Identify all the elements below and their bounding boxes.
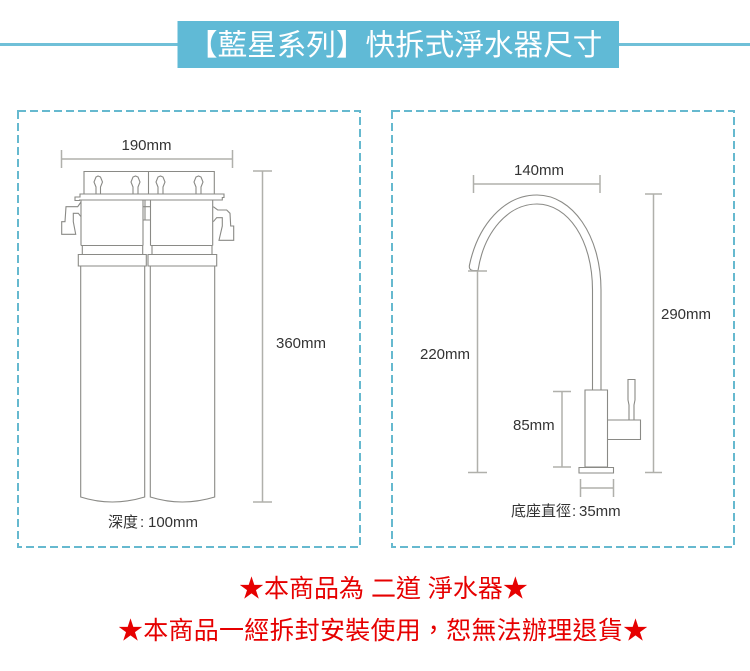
label: depth: 深度 (108, 514, 138, 531)
dimension: height 85mm (513, 392, 571, 467)
dimension: height 360mm (253, 171, 326, 502)
dimension: base diameter: : (572, 503, 576, 520)
panel: faucet dimensions (392, 111, 734, 547)
dimension: width 140mm: 140mm (514, 162, 564, 179)
notice: no returns: ★本商品一經拆封安裝使用，恕無法辦理退貨★ (118, 617, 648, 645)
dimension: base diameter: 底座直徑 (511, 503, 571, 520)
notice: product contents: ★本商品為 二道 淨水器★ (239, 575, 528, 603)
dimension: height 290mm: 290mm (661, 306, 711, 323)
dimension: base diameter (511, 479, 621, 520)
label: depth: 100mm (148, 514, 198, 531)
dimension: height 220mm (420, 271, 487, 472)
dimension: height 85mm: 85mm (513, 417, 555, 434)
panel: filter dimensions (18, 111, 360, 547)
dimension: width 190mm (62, 137, 232, 168)
header band (0, 21, 750, 68)
dimension: height 360mm: 360mm (276, 335, 326, 352)
dimension: height 220mm: 220mm (420, 346, 470, 363)
dimension: height 290mm (645, 194, 711, 472)
illustration: faucet (469, 195, 640, 473)
label: depth: : (140, 514, 144, 531)
dimension: base diameter: 35mm (579, 503, 621, 520)
dimension: width 140mm (474, 162, 600, 193)
dimension: width 190mm: 190mm (121, 137, 172, 154)
illustration: twin filter (62, 172, 234, 502)
title: 【藍星系列】快拆式淨水器尺寸 (188, 29, 602, 62)
